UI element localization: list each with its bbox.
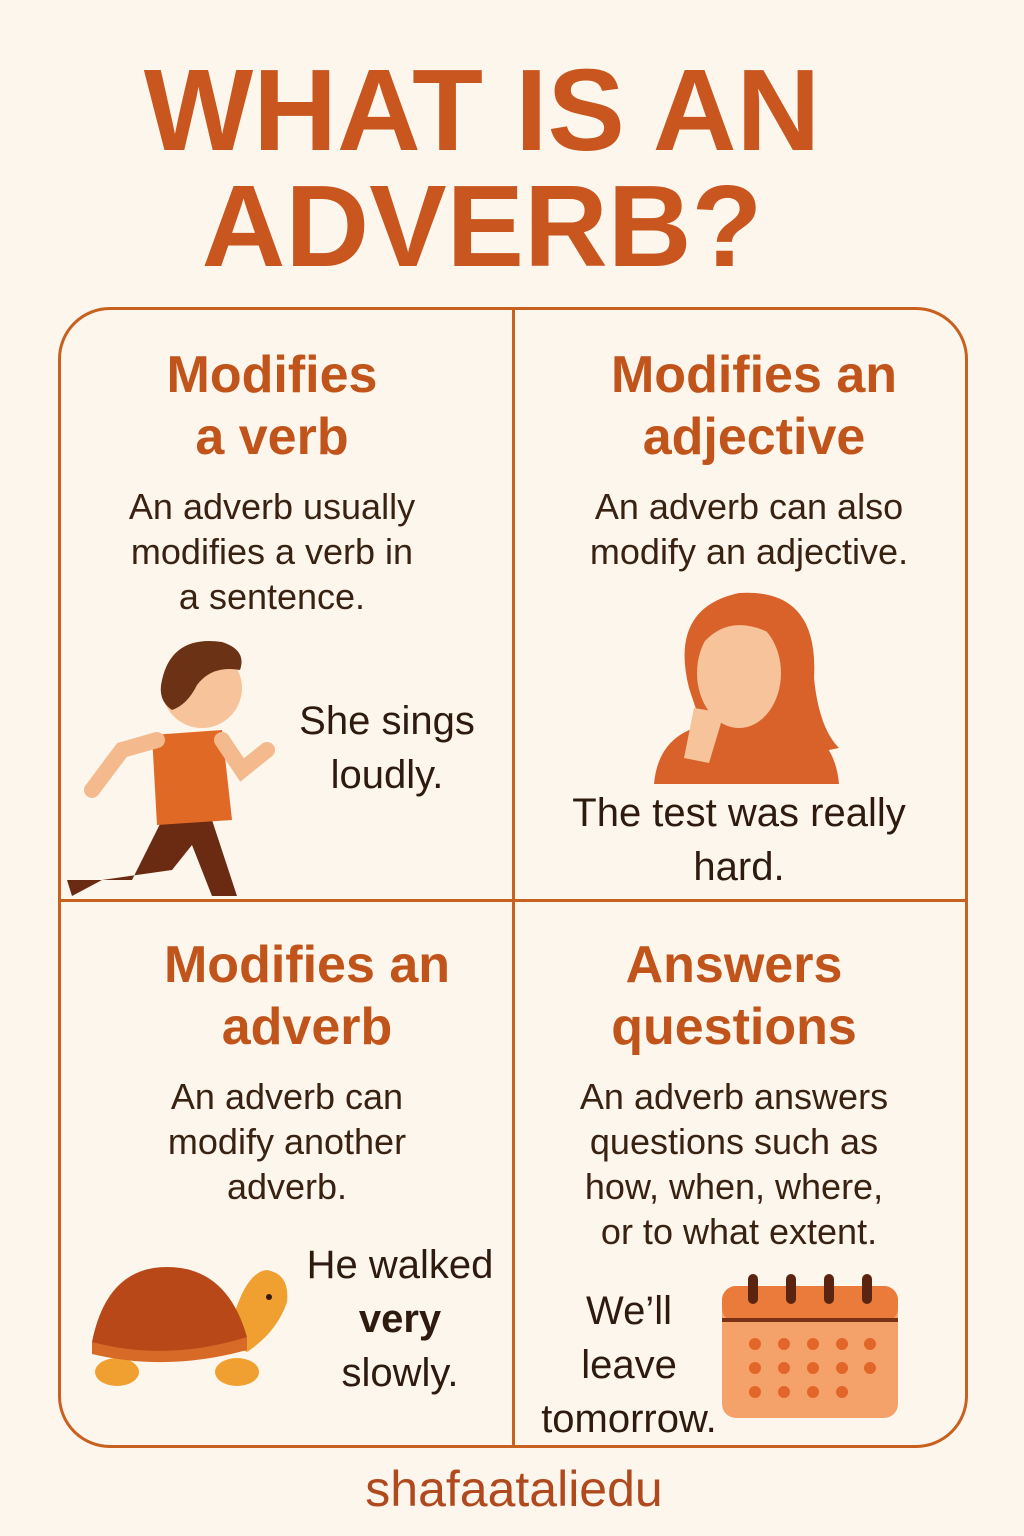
text: An adverb answers xyxy=(580,1076,888,1117)
example: very xyxy=(359,1297,441,1341)
example: He walked xyxy=(307,1243,493,1287)
heading: questions xyxy=(611,998,857,1056)
example xyxy=(307,1243,493,1395)
example: leave xyxy=(581,1343,677,1387)
heading: Modifies an xyxy=(164,936,450,994)
text: adverb. xyxy=(227,1166,347,1207)
heading: adverb xyxy=(222,998,392,1056)
text: An adverb can also xyxy=(595,486,903,527)
title: ADVERB? xyxy=(202,161,762,291)
text: questions such as xyxy=(590,1121,878,1162)
text: modify another xyxy=(168,1121,406,1162)
heading xyxy=(611,346,897,466)
heading: adjective xyxy=(643,408,865,466)
icon: thinking girl xyxy=(654,592,839,784)
heading: Modifies xyxy=(167,346,377,404)
panel: modifies an adjective xyxy=(572,346,908,889)
icon: running boy xyxy=(67,641,275,896)
title: WHAT IS AN xyxy=(144,45,820,175)
example: tomorrow. xyxy=(541,1397,717,1441)
example: loudly. xyxy=(331,753,443,797)
panel: modifies a verb xyxy=(67,346,475,896)
footer: shafaataliedu xyxy=(365,1461,663,1517)
example xyxy=(572,791,906,889)
text xyxy=(590,486,908,572)
example xyxy=(541,1289,717,1441)
text xyxy=(168,1076,406,1207)
grid frame xyxy=(58,307,968,1448)
text xyxy=(580,1076,888,1252)
text: modifies a verb in xyxy=(131,531,413,572)
title xyxy=(144,45,820,291)
text: modify an adjective. xyxy=(590,531,908,572)
example: She sings xyxy=(299,699,475,743)
text: or to what extent. xyxy=(601,1211,877,1252)
heading: a verb xyxy=(195,408,349,466)
panel: modifies an adverb xyxy=(92,936,493,1395)
heading xyxy=(164,936,450,1056)
example: We’ll xyxy=(586,1289,672,1333)
panel: answers questions xyxy=(541,936,898,1441)
heading: Answers xyxy=(626,936,842,994)
icon: turtle xyxy=(92,1267,288,1386)
icon: calendar xyxy=(722,1274,898,1418)
heading xyxy=(167,346,377,466)
example: hard. xyxy=(693,845,785,889)
heading: Modifies an xyxy=(611,346,897,404)
example: The test was really xyxy=(572,791,906,835)
text: how, when, where, xyxy=(585,1166,883,1207)
text xyxy=(129,486,415,617)
text: An adverb can xyxy=(171,1076,403,1117)
example xyxy=(299,699,475,797)
heading xyxy=(611,936,857,1056)
example: slowly. xyxy=(341,1351,459,1395)
text: a sentence. xyxy=(179,576,365,617)
text: An adverb usually xyxy=(129,486,415,527)
